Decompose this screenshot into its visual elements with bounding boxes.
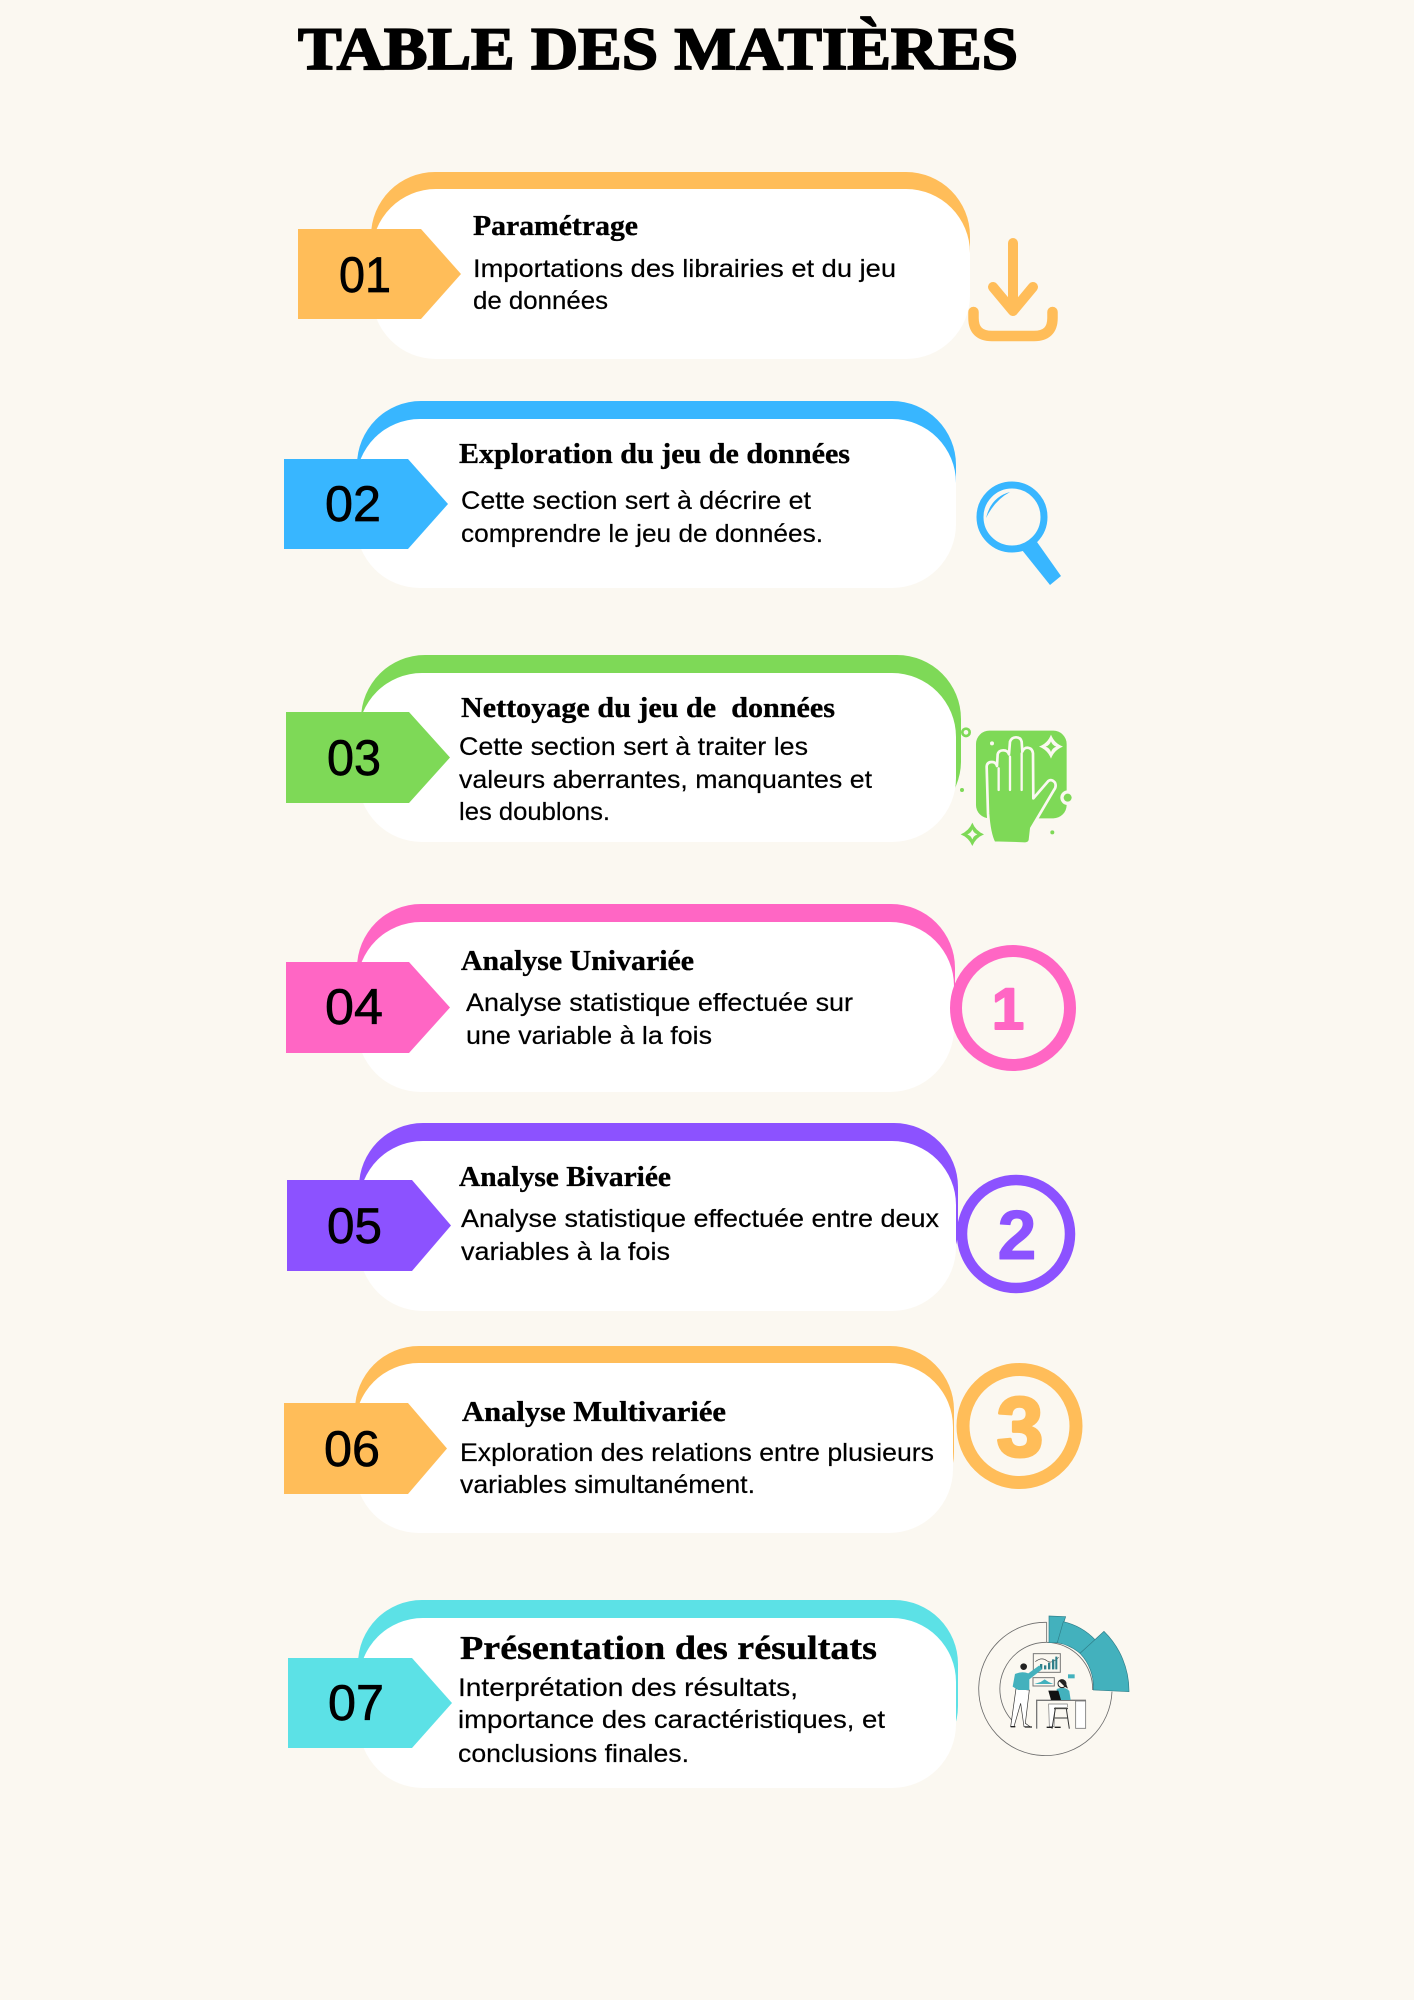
description: les doublons. [459,798,610,826]
description: de données [473,287,608,315]
description [458,1674,885,1768]
icon: number three [963,1370,1076,1482]
description: une variable à la fois [466,1022,712,1050]
description: comprendre le jeu de données. [461,520,823,548]
heading: Présentation des résultats [460,1630,877,1667]
description: Exploration des relations entre plusieurs [460,1439,934,1467]
description: conclusions finales. [458,1740,689,1768]
number: 07 [328,1675,384,1731]
number: 04 [325,979,383,1035]
description [460,1439,934,1499]
description: importance des caractéristiques, et [458,1706,885,1734]
icon: magnifier [980,485,1061,585]
description: variables à la fois [461,1238,670,1266]
description [459,733,872,826]
description: Interprétation des résultats, [458,1674,798,1702]
number arrow [284,1403,447,1494]
card backing [355,1346,954,1516]
description [473,255,896,315]
heading: Paramétrage [473,211,638,242]
panel: 02 Exploration [284,401,956,588]
description: Analyse statistique effectuée entre deux [461,1205,940,1233]
icon: data presentation illustration [979,1616,1129,1756]
description [461,1205,940,1266]
card backing [371,172,970,342]
number: 06 [324,1421,380,1477]
icon: number three: 3 [997,1380,1043,1474]
description: Importations des librairies et du jeu [473,255,896,283]
icon: number one [956,951,1070,1065]
panel: 03 Nettoyage [286,655,961,842]
card body [359,1618,956,1788]
number: 02 [325,476,381,532]
number arrow [286,962,450,1053]
description: Cette section sert à décrire et [461,487,811,515]
panel: 01 Paramétrage [298,172,970,359]
panel: 07 Présentation des résultats [288,1600,958,1788]
number arrow [298,229,461,319]
title: TABLE DES MATIÈRES [298,16,1018,82]
card backing [357,904,955,1074]
heading: Exploration du jeu de données [459,439,850,470]
card backing [361,655,961,825]
number: 05 [327,1198,382,1254]
description: Analyse statistique effectuée sur [466,989,853,1017]
description [466,989,853,1050]
card body [356,419,956,588]
number arrow [284,459,448,549]
card body [357,922,954,1092]
description: Cette section sert à traiter les [459,733,808,761]
icon: number two [962,1180,1070,1288]
card body [358,673,956,842]
icon: number one: 1 [992,977,1024,1042]
number arrow [288,1658,452,1748]
card backing [358,1600,958,1770]
heading: Nettoyage du jeu de données [461,693,835,724]
icon: cleaning hand [960,729,1075,846]
card backing [359,1123,958,1293]
icon: download [974,243,1052,336]
card backing [357,401,956,571]
number: 01 [339,247,391,303]
panel: 04 Analyse Univariée [286,904,955,1092]
panel: 06 Analyse Multivariée [284,1346,954,1533]
heading: Analyse Univariée [461,946,694,977]
number arrow [286,712,450,803]
heading: Analyse Bivariée [459,1162,671,1193]
icon: number two: 2 [998,1196,1036,1274]
description [461,487,823,548]
heading: Analyse Multivariée [462,1397,726,1428]
panel: 05 Analyse Bivariée [287,1123,958,1311]
number arrow [287,1180,451,1271]
description: variables simultanément. [460,1471,755,1499]
card body [359,1141,956,1311]
card body [355,1363,953,1533]
number: 03 [327,730,381,786]
card body [372,189,970,359]
description: valeurs aberrantes, manquantes et [459,766,872,794]
